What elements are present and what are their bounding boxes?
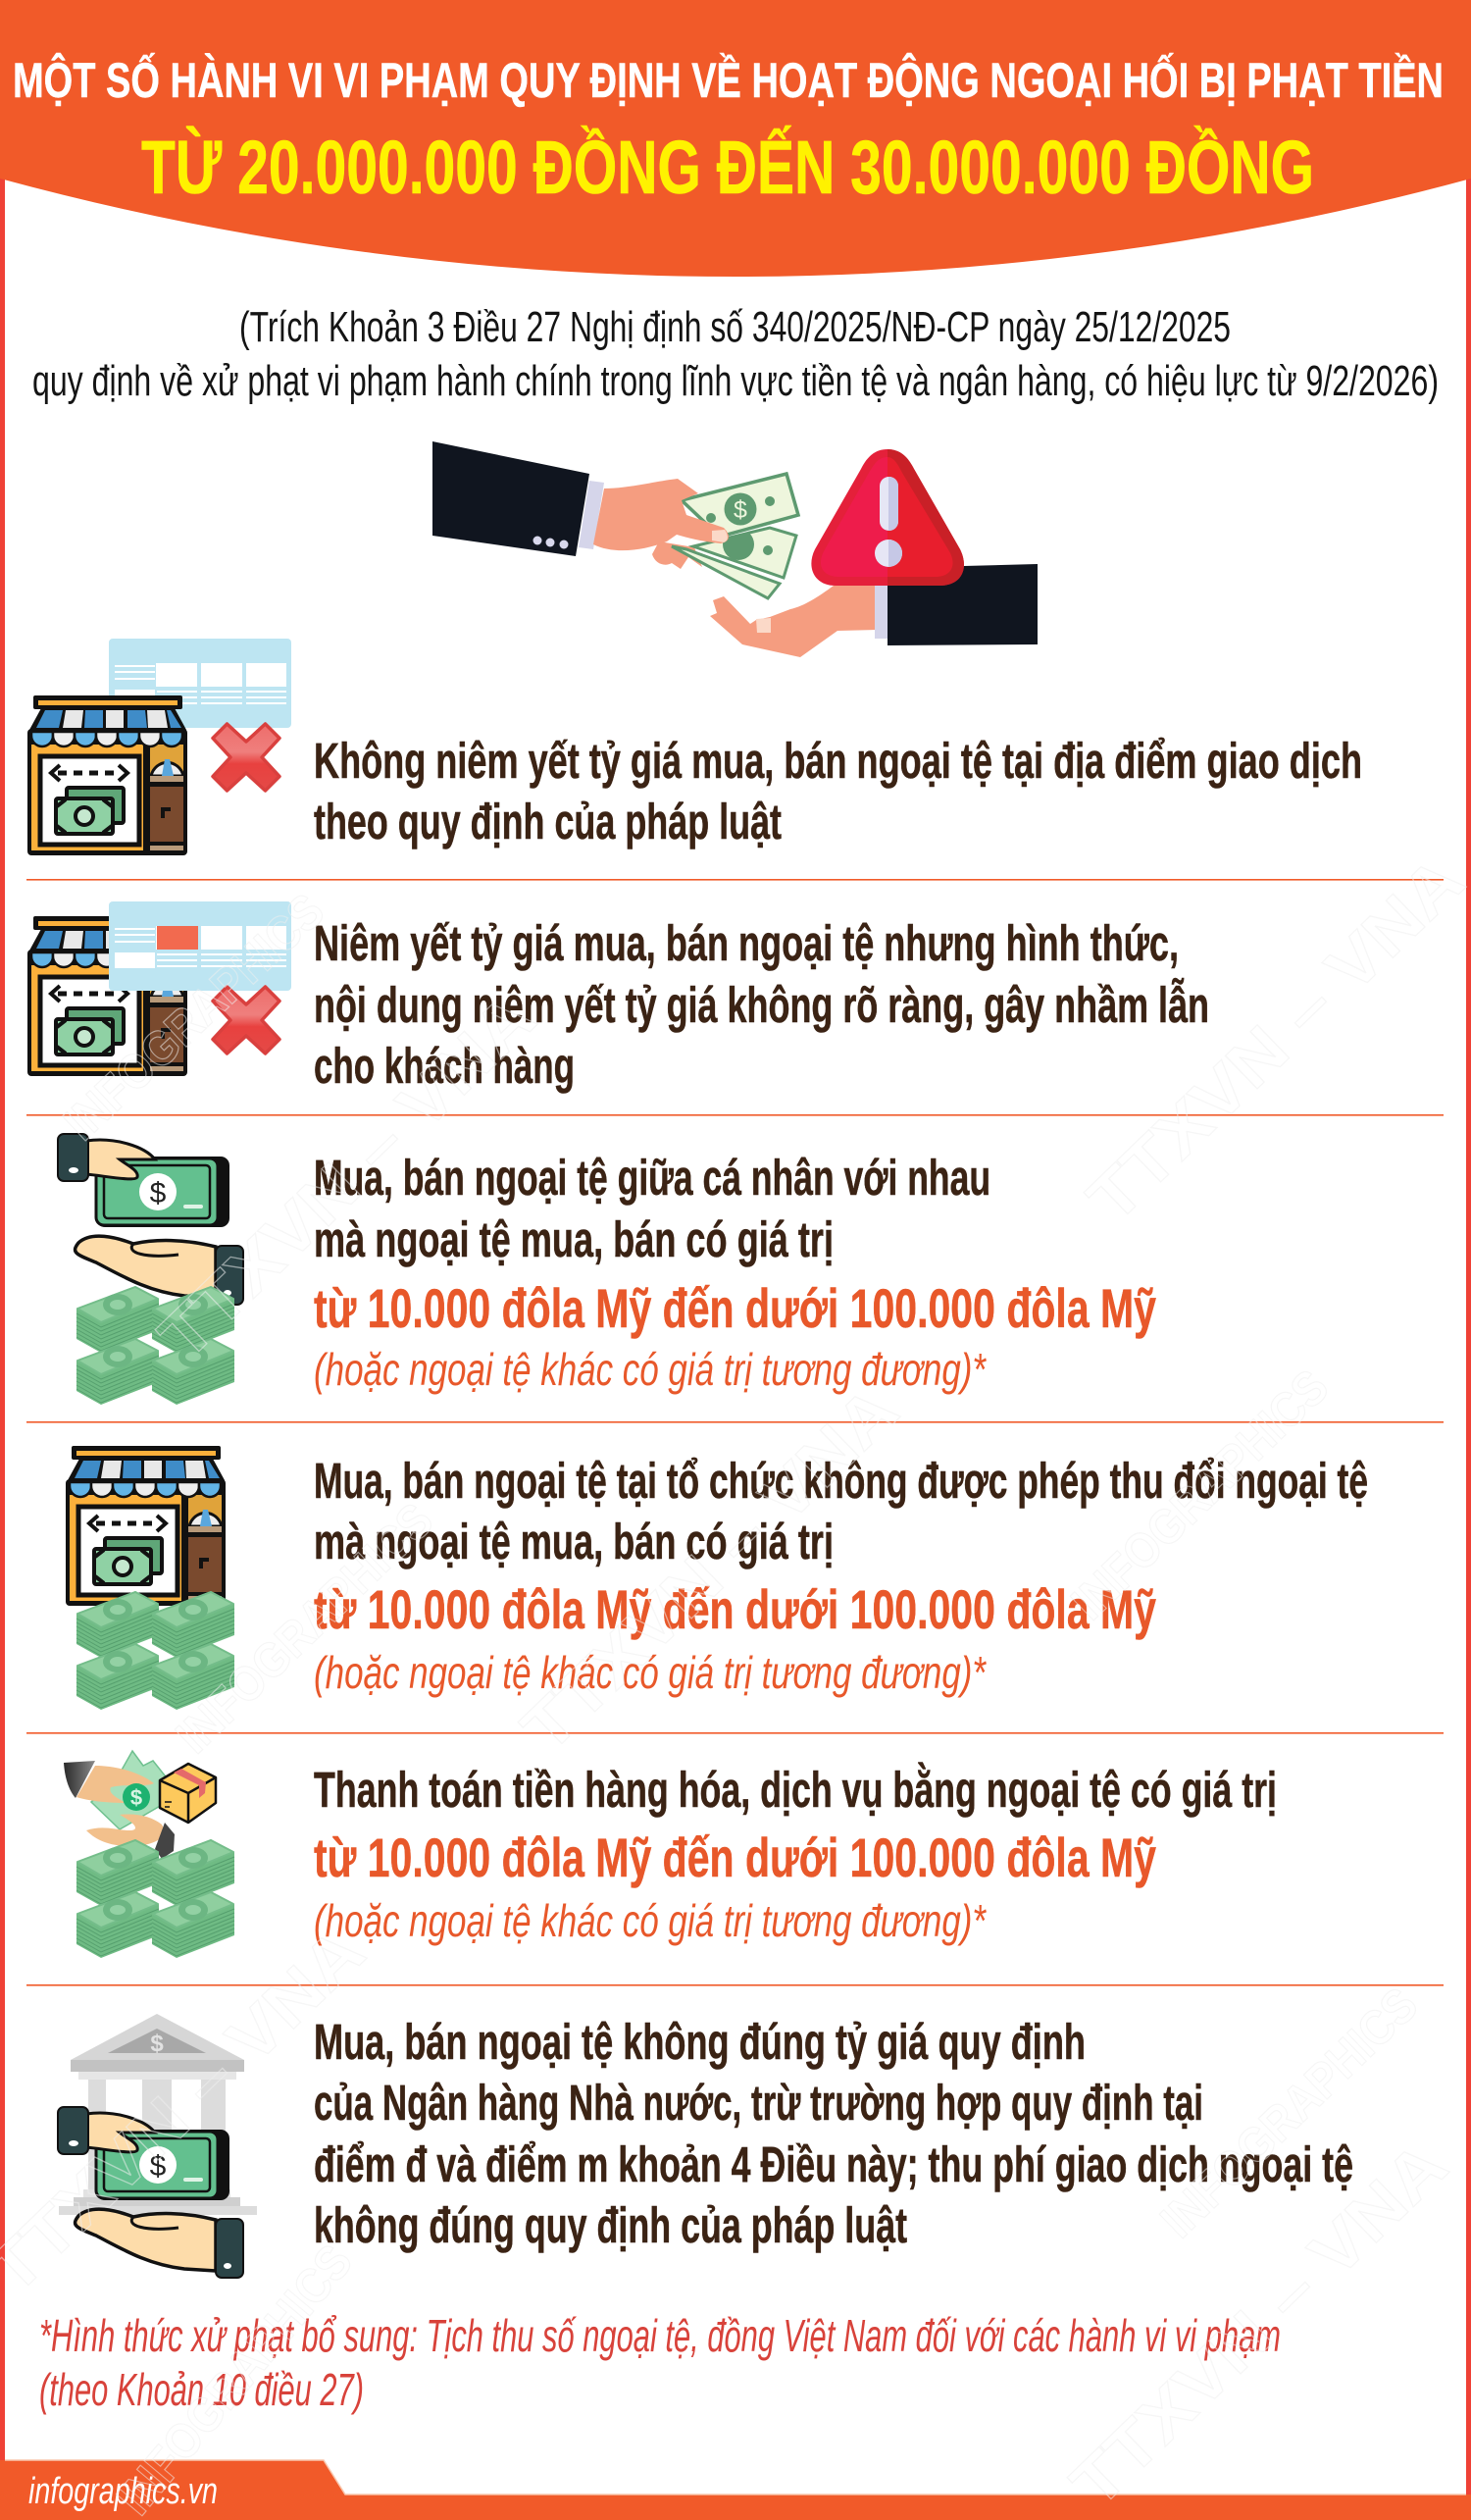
subtitle citation [32, 303, 1439, 405]
text: no rate posted [314, 733, 1362, 849]
watermarks: INFOGRAPHICS [53, 883, 334, 1151]
row 4 [66, 1446, 1368, 1710]
watermarks: TTXVN – VNA [1057, 2128, 1461, 2520]
icon: red cross [213, 987, 279, 1054]
row 5 [64, 1751, 1277, 1958]
row 3 [58, 1134, 1156, 1405]
text: no rate posted: theo quy định của pháp luật [314, 794, 782, 849]
text: unauthorised organisation: (hoặc ngoại tệ khác có giá trị tương đương)* [314, 1647, 988, 1698]
watermarks [0, 843, 1471, 2520]
text: paying in foreign currency: (hoặc ngoại tệ khác có giá trị tương đương)* [314, 1895, 988, 1946]
watermarks: TTXVN – VNA [1074, 843, 1471, 1237]
icon: money stacks [76, 1591, 234, 1710]
row 6 [58, 2014, 1353, 2278]
text: wrong exchange rate: không đúng quy định của pháp luật [314, 2197, 907, 2253]
text: individuals trading foreign currency: (hoặc ngoại tệ khác có giá trị tương đương)* [314, 1344, 988, 1395]
icon: hands exchanging note [58, 2107, 243, 2278]
illustration: bribing hands with money and warning sign: $ [734, 496, 747, 524]
header banner [0, 0, 1471, 277]
text: unclear rate posting: cho khách hàng [314, 1038, 575, 1094]
row 2 [27, 901, 1209, 1094]
icon: rate board with highlighted cell [109, 901, 291, 991]
icon: exchange shop [27, 916, 187, 1076]
icon: hands exchanging note [58, 1134, 243, 1305]
text: unauthorised organisation: mà ngoại tệ mua, bán có giá trị [314, 1514, 834, 1569]
text: wrong exchange rate [314, 2014, 1353, 2253]
footnote: additional penalties [39, 2310, 1281, 2415]
watermarks: TTXVN – VNA [508, 1372, 912, 1767]
icon: money stacks [76, 1839, 234, 1958]
text: individuals trading foreign currency: mà ngoại tệ mua, bán có giá trị [314, 1211, 834, 1267]
icon: bank building: $ [150, 2031, 164, 2057]
text: unauthorised organisation: từ 10.000 đôla Mỹ đến dưới 100.000 đôla Mỹ [314, 1578, 1156, 1640]
footer website: infographics.vn [28, 2471, 218, 2512]
footer band [0, 2460, 1471, 2520]
icon: money stacks [76, 1286, 234, 1405]
footnote: additional penalties: (theo Khoản 10 điều 27) [39, 2364, 364, 2415]
watermarks: INFOGRAPHICS [1150, 1977, 1428, 2248]
text: individuals trading foreign currency: từ 10.000 đôla Mỹ đến dưới 100.000 đôla Mỹ [314, 1277, 1156, 1339]
text: wrong exchange rate: Mua, bán ngoại tệ không đúng tỷ giá quy định [314, 2014, 1086, 2070]
watermarks: INFOGRAPHICS [107, 2235, 363, 2520]
icon: bank building [59, 2014, 257, 2215]
text: unclear rate posting [314, 915, 1209, 1094]
watermarks: INFOGRAPHICS [1061, 1359, 1339, 1630]
text: paying in foreign currency [314, 1761, 1277, 1946]
icon: exchange shop [66, 1446, 226, 1606]
icon: goods payment with hands and box [64, 1751, 216, 1859]
row 1 [27, 639, 1362, 855]
illustration: bribing hands with money and warning sign [432, 441, 1038, 657]
icon: red cross [213, 724, 279, 791]
icon: rate board behind shop [109, 639, 291, 728]
icon: goods payment with hands and box: $ [130, 1785, 142, 1810]
text: unauthorised organisation [314, 1453, 1368, 1698]
text: individuals trading foreign currency: Mua, bán ngoại tệ giữa cá nhân với nhau [314, 1150, 990, 1206]
watermarks: TTXVN – VNA [145, 980, 549, 1374]
text: paying in foreign currency: từ 10.000 đôla Mỹ đến dưới 100.000 đôla Mỹ [314, 1826, 1156, 1888]
watermarks: INFOGRAPHICS [166, 1492, 443, 1764]
icon: exchange shop [27, 695, 187, 855]
text: individuals trading foreign currency [314, 1150, 1156, 1395]
